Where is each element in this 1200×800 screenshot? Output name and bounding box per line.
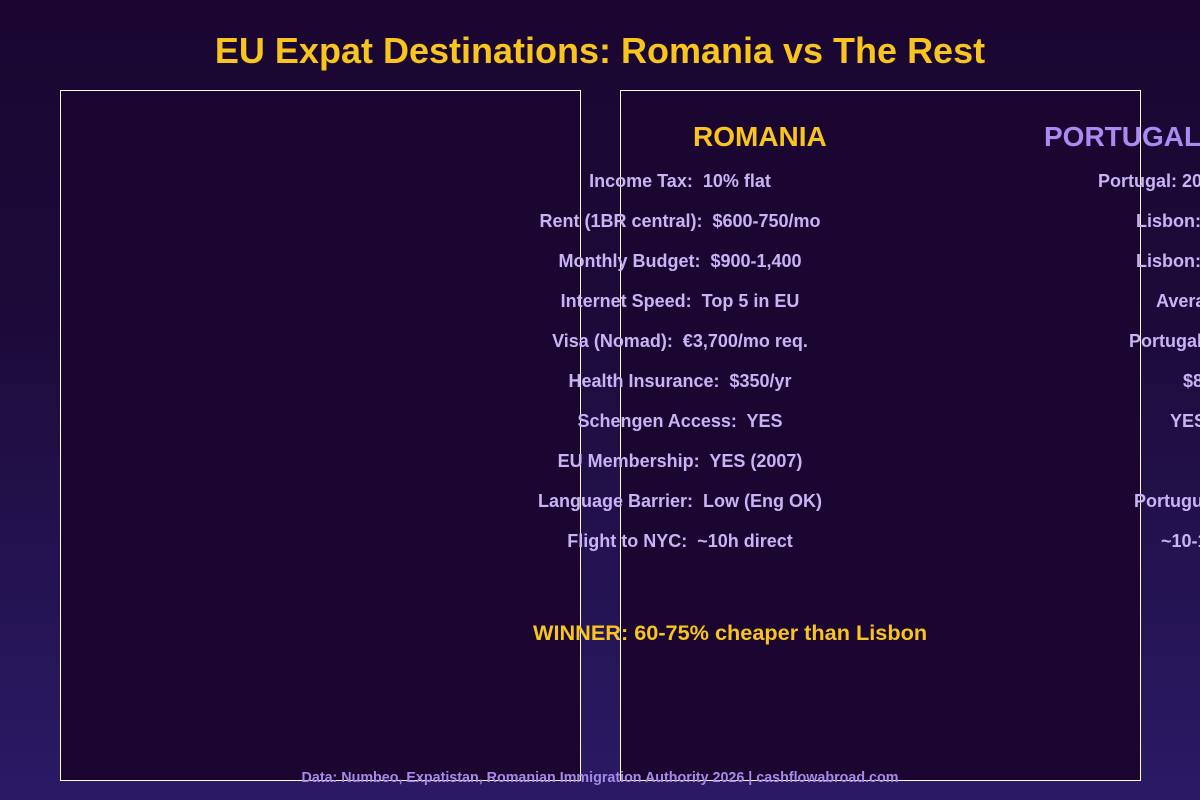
Romania rows: Income Tax: 10% flat <box>589 171 771 191</box>
Romania rows: Schengen Access: YES <box>577 411 783 431</box>
Romania rows: Language Barrier: Low (Eng OK) <box>538 491 822 511</box>
Romania rows <box>538 171 822 551</box>
Romania rows: Internet Speed: Top 5 in EU <box>561 291 799 311</box>
panel: right <box>620 90 1141 781</box>
heading: Romania: ROMANIA <box>693 121 827 152</box>
footer: Data: Numbeo, Expatistan, Romanian Immigration Authority 2026 | cashflowabroad.com <box>302 770 898 786</box>
callout: winner: WINNER: 60-75% cheaper than Lisbon <box>533 620 927 645</box>
heading: Portugal: PORTUGAL <box>1044 121 1200 152</box>
Romania rows: EU Membership: YES (2007) <box>558 451 802 471</box>
panel: left <box>60 90 581 781</box>
Romania rows: Rent (1BR central): $600-750/mo <box>539 211 821 231</box>
Romania rows: Flight to NYC: ~10h direct <box>567 531 793 551</box>
Portugal rows <box>1098 171 1200 551</box>
Romania rows: Monthly Budget: $900-1,400 <box>558 251 802 271</box>
Romania rows: Health Insurance: $350/yr <box>568 371 792 391</box>
title: EU Expat Destinations: Romania vs The Rest <box>215 30 985 71</box>
Romania rows: Visa (Nomad): €3,700/mo req. <box>552 331 808 351</box>
